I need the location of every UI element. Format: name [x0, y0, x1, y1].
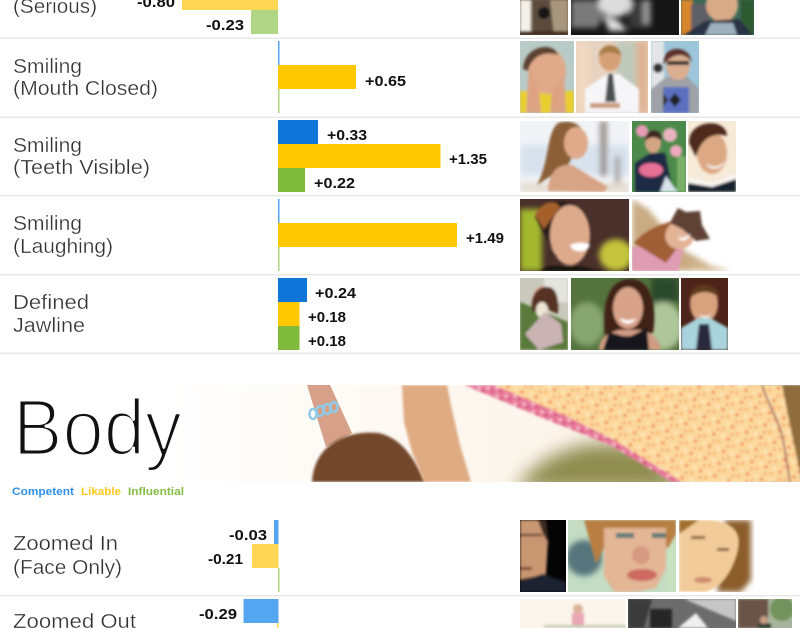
values: +0.33 — [327, 127, 367, 144]
values: -0.21 — [208, 551, 243, 568]
values: -0.23 — [206, 17, 244, 34]
row label: Smiling — [13, 55, 82, 78]
values — [208, 527, 267, 568]
fabric — [464, 385, 800, 482]
row: Zoomed In (Face Only) — [13, 520, 761, 592]
legend — [12, 486, 184, 498]
photos — [520, 121, 736, 192]
values — [137, 0, 244, 34]
values — [314, 127, 487, 192]
bars — [278, 199, 457, 271]
heading: Body: Body — [13, 383, 182, 472]
value: +1.49 — [466, 230, 504, 247]
bars — [244, 599, 278, 628]
values — [308, 285, 357, 350]
legend: Competent — [12, 486, 74, 498]
row label: Smiling — [13, 212, 82, 235]
value: -0.29 — [199, 606, 237, 623]
row label: (Teeth Visible) — [13, 156, 150, 179]
values: -0.03 — [229, 527, 267, 544]
row label: Defined — [13, 291, 89, 314]
values: +1.35 — [449, 151, 487, 168]
row label — [13, 532, 122, 579]
photos — [520, 41, 699, 113]
row label: Jawline — [13, 314, 85, 337]
right arm — [402, 385, 471, 482]
legend: Influential — [128, 486, 184, 498]
bars — [182, 0, 278, 34]
photos — [520, 597, 794, 628]
bars — [278, 120, 440, 192]
row: Serious — [13, 0, 754, 35]
bars — [278, 278, 307, 350]
row label: (Mouth Closed) — [13, 77, 158, 100]
left arm with bracelet — [307, 385, 352, 447]
legend: Likable — [81, 486, 121, 498]
row: Zoomed Out — [13, 597, 794, 628]
values: +0.24 — [315, 285, 357, 302]
row: Smiling (Laughing) — [13, 199, 740, 271]
bars — [252, 520, 280, 592]
row: Smiling (Teeth Visible) — [13, 120, 736, 192]
photos — [520, 278, 728, 350]
values: +0.18 — [308, 309, 346, 326]
values: +0.18 — [308, 333, 346, 350]
value: +0.65 — [365, 73, 406, 90]
values: +0.22 — [314, 175, 355, 192]
photos — [520, 0, 754, 35]
row label: Zoomed In — [13, 532, 118, 555]
row: Defined Jawline — [13, 278, 728, 350]
row label: Smiling — [13, 134, 82, 157]
photos — [520, 199, 740, 271]
photos — [520, 520, 761, 592]
row label — [13, 291, 89, 337]
row label — [13, 55, 158, 100]
row label — [13, 134, 150, 179]
row label: (Laughing) — [13, 235, 113, 258]
hair — [312, 433, 425, 482]
bars — [278, 41, 356, 113]
row label — [13, 212, 113, 258]
banner image: woman with raised arms and fabric — [170, 385, 800, 490]
row: Smiling (Mouth Closed) — [13, 41, 699, 113]
row label: (Face Only) — [13, 556, 122, 579]
